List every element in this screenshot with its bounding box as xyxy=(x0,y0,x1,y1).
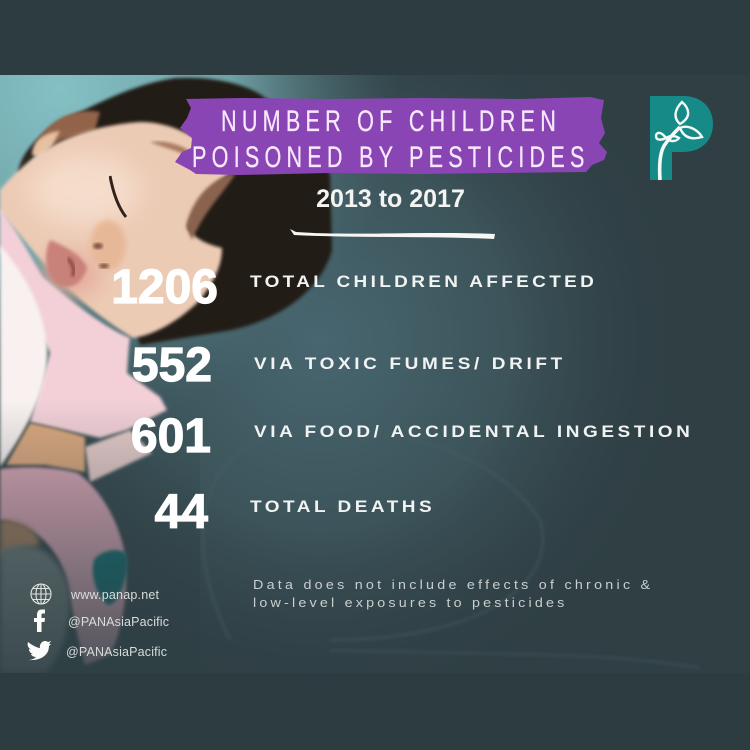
white brush divider xyxy=(290,229,495,239)
lips xyxy=(46,240,87,287)
tube lines xyxy=(203,431,543,640)
stat: via toxic fumes: 552 xyxy=(132,339,212,392)
purple brush title banner xyxy=(175,97,607,175)
stat: via food: VIA FOOD/ ACCIDENTAL INGESTION xyxy=(254,422,690,441)
photo: sleeping child xyxy=(0,75,750,673)
stat: via food: 601 xyxy=(131,410,211,463)
stat: total children affected: TOTAL CHILDREN AFFECTED xyxy=(250,272,594,291)
footnote: low-level exposures to pesticides xyxy=(253,596,564,610)
icon: twitter xyxy=(28,641,51,660)
logo: PAN P with plant xyxy=(650,96,713,180)
white blanket xyxy=(0,245,47,467)
stat: total children affected xyxy=(111,261,594,314)
facebook handle: @PANAsiaPacific xyxy=(68,615,169,629)
icon: facebook xyxy=(34,610,45,632)
stat: total children affected: 1206 xyxy=(111,261,218,314)
stat: total deaths xyxy=(155,486,432,539)
eye xyxy=(110,176,126,217)
arm xyxy=(6,423,85,472)
pale sleeve xyxy=(85,430,152,482)
stat: total deaths: 44 xyxy=(155,486,208,539)
twitter handle: @PANAsiaPacific xyxy=(66,645,167,659)
subtitle: date range: 2013 to 2017 xyxy=(316,185,465,213)
teal patch xyxy=(93,550,128,605)
nostrils xyxy=(93,243,103,249)
title line 2: POISONED BY PESTICIDES xyxy=(192,139,584,174)
pink wrist band xyxy=(0,467,126,665)
footnote: Data does not include effects of chronic & xyxy=(253,578,650,592)
icon: globe xyxy=(31,584,51,604)
face xyxy=(0,122,235,338)
footnote xyxy=(253,578,650,610)
website: www.panap.net xyxy=(70,588,160,602)
pink clothing xyxy=(0,208,167,438)
stat: via toxic fumes xyxy=(132,339,562,392)
hair xyxy=(18,78,332,345)
stat: total deaths: TOTAL DEATHS xyxy=(250,497,432,516)
hand xyxy=(0,520,40,556)
stat: via toxic fumes: VIA TOXIC FUMES/ DRIFT xyxy=(254,354,562,373)
stat: via food xyxy=(131,410,690,463)
title line 1: NUMBER OF CHILDREN xyxy=(221,103,556,138)
ear xyxy=(32,131,60,158)
